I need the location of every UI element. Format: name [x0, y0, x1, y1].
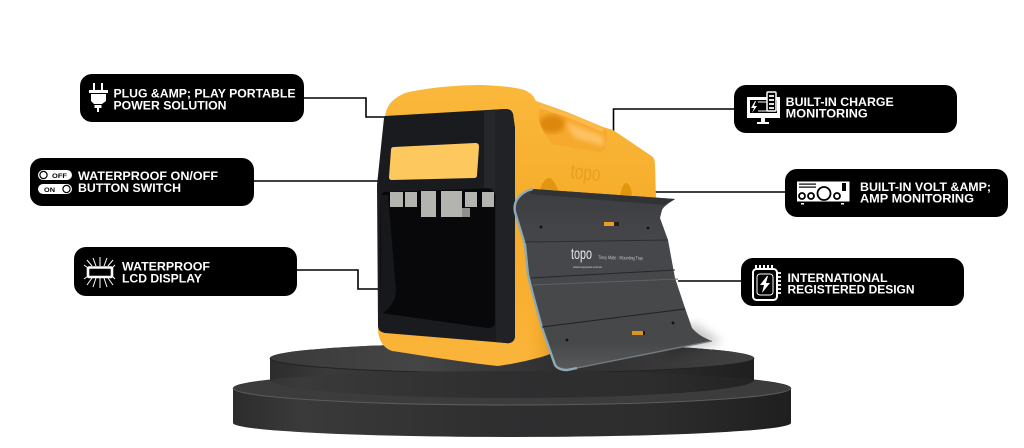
podium — [233, 343, 791, 437]
connector lines — [254, 98, 785, 289]
callout text: INTERNATIONAL — [788, 271, 888, 285]
callout text: PLUG &AMP; PLAY PORTABLE — [114, 87, 296, 101]
embossed brand mark: topo — [569, 160, 602, 186]
callout text: BUILT-IN CHARGE — [786, 95, 894, 109]
icon: on off switches — [38, 170, 72, 194]
shaded body flank — [525, 200, 560, 360]
socket cavity — [380, 188, 495, 328]
product: battery box — [377, 85, 656, 366]
orange body — [378, 85, 656, 366]
tray web address: www.topopower.com.au — [572, 265, 602, 269]
product: mounting tray — [515, 189, 712, 370]
body notches — [540, 178, 632, 195]
icon: monitor with battery — [747, 92, 780, 124]
cavity left wall — [381, 195, 396, 313]
callout text — [786, 95, 894, 121]
podium lower tier — [233, 371, 791, 437]
callout text: MONITORING — [786, 107, 868, 121]
callout text — [860, 180, 991, 206]
terminal blocks — [390, 191, 494, 217]
callout text — [78, 169, 218, 195]
tray edge — [515, 189, 577, 370]
callout text — [114, 87, 296, 112]
callout: on/off switch — [30, 158, 254, 206]
icon: amp meter — [797, 182, 850, 204]
black front panel — [377, 109, 515, 343]
callout text: LCD DISPLAY — [122, 271, 202, 285]
callout: plug and play — [80, 74, 304, 122]
icon: LCD chip — [84, 257, 115, 288]
tray brand text: topo — [571, 246, 592, 263]
icon: plug — [89, 83, 108, 112]
tray slots and holes — [540, 222, 674, 341]
callout text: AMP MONITORING — [860, 192, 974, 206]
tray folds — [525, 240, 685, 327]
callout text — [122, 260, 210, 285]
callout: volt and amp monitoring — [785, 169, 1008, 217]
tray top lip — [530, 189, 675, 205]
tray front lip edge — [577, 341, 712, 368]
callout: LCD display — [74, 247, 297, 296]
carry handle — [539, 104, 607, 152]
yellow label panel — [389, 143, 479, 180]
icon: on off switches: ON — [44, 187, 55, 194]
panel side bevel — [484, 109, 515, 343]
podium upper tier — [270, 343, 754, 398]
callout text: WATERPROOF ON/OFF — [78, 169, 218, 183]
tray product text: Tinny Mate : Mounting Tray — [598, 255, 643, 262]
callout text: BUTTON SWITCH — [78, 181, 181, 195]
callout text: REGISTERED DESIGN — [788, 283, 914, 297]
callout text: POWER SOLUTION — [114, 98, 226, 112]
tray shadow — [660, 322, 722, 358]
icon: on off switches: OFF — [52, 173, 67, 180]
icon: design chip — [753, 265, 781, 300]
callout text: BUILT-IN VOLT &AMP; — [860, 180, 991, 194]
callout text: WATERPROOF — [122, 260, 210, 274]
callout: registered design — [741, 258, 964, 306]
callout: charge monitoring — [734, 85, 957, 133]
callout text — [788, 271, 914, 297]
